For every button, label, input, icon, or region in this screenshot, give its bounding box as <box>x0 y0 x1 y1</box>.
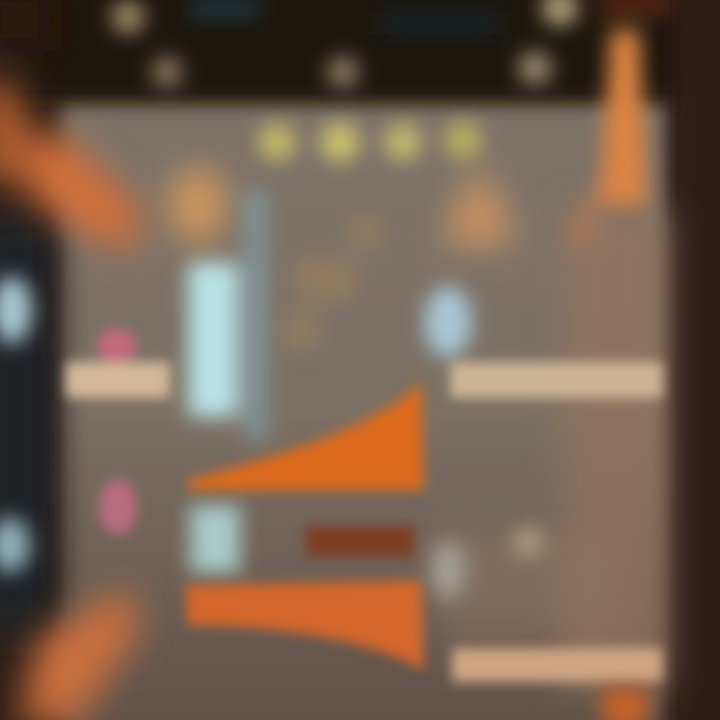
left dark edge highlights <box>0 276 32 573</box>
right header bars <box>450 362 662 682</box>
orange area chart lower <box>186 580 424 670</box>
peach bells <box>170 160 520 245</box>
pale blue column <box>188 190 472 573</box>
lower left orange glow <box>20 585 140 720</box>
ceiling lights <box>111 0 578 88</box>
orange area chart upper <box>188 382 424 490</box>
dark orange bar <box>306 526 414 556</box>
left pink markers and labels <box>66 328 170 535</box>
yellow title dots <box>258 121 482 162</box>
right table details <box>430 527 648 720</box>
faint centre sketch <box>282 212 385 352</box>
orange side lights <box>0 0 140 255</box>
